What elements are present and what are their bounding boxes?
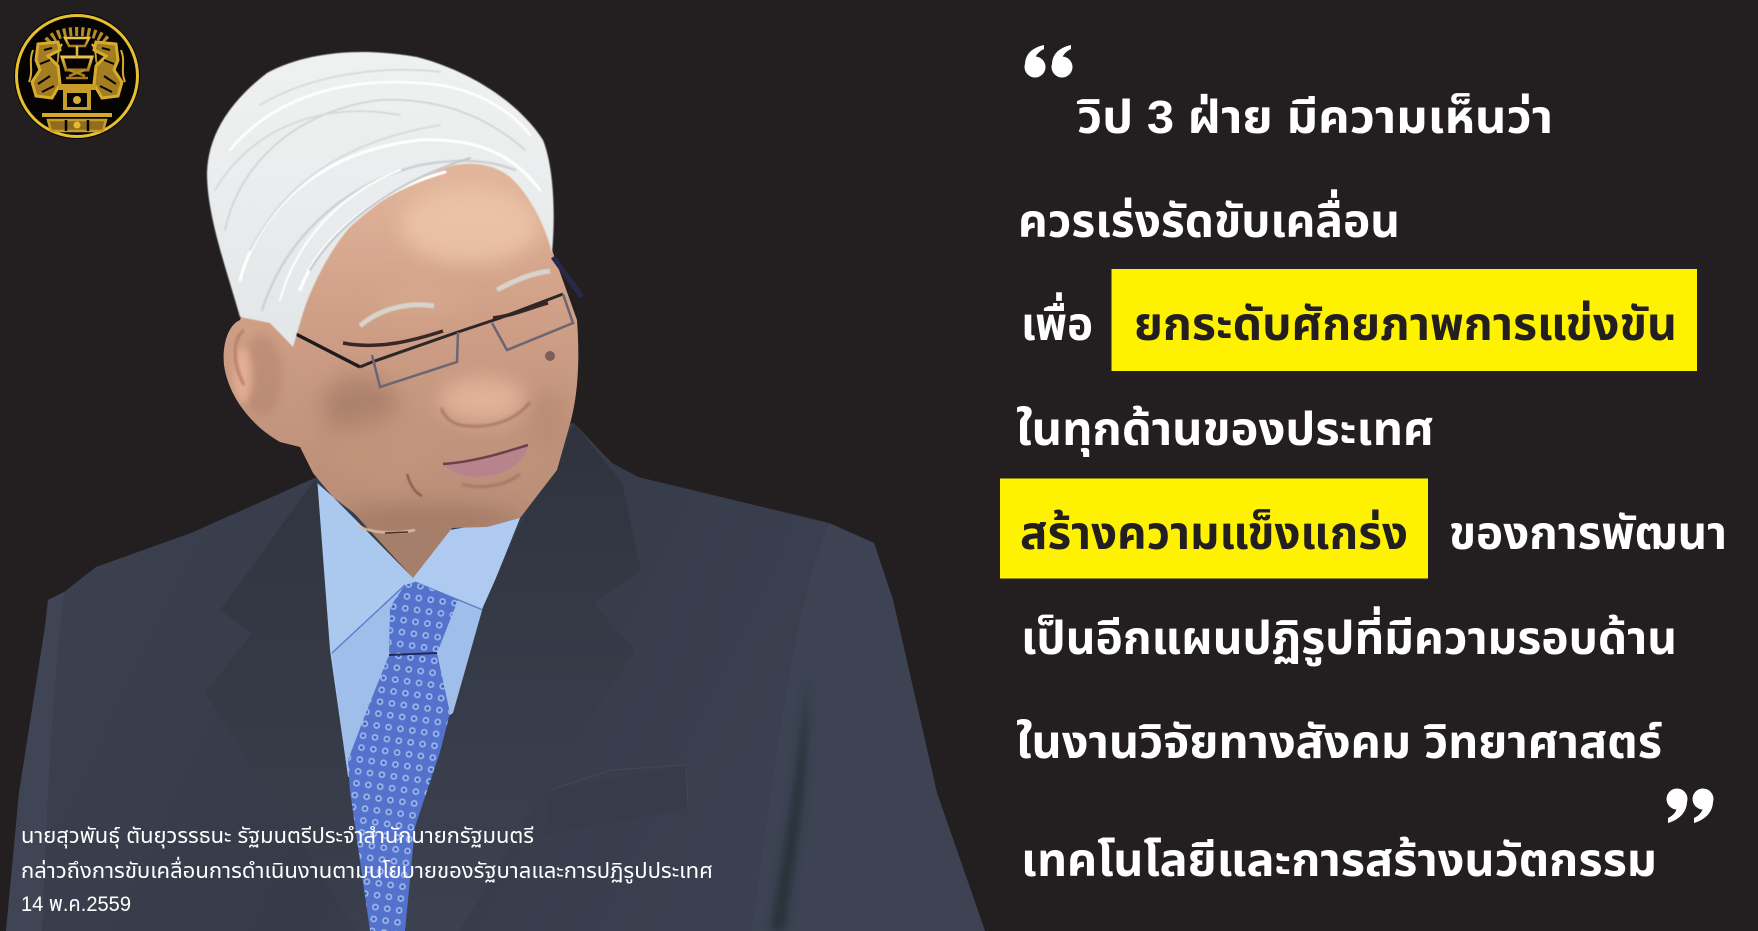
eyebrows: [360, 271, 550, 326]
tie: [348, 582, 458, 931]
logo: government seal: [14, 13, 140, 139]
neck: [333, 490, 452, 578]
mouth: [407, 445, 528, 496]
left collar: [317, 483, 413, 653]
portrait photo: man in suit: [6, 52, 985, 931]
eyes: [343, 303, 548, 345]
right guardian lion: [94, 42, 125, 98]
line 1: วิป 3 ฝ่าย มีความเห็นว่า: [1077, 91, 1553, 143]
glasses: [292, 257, 582, 387]
line 8: เทคโนโลยีและการสร้างนวัตกรรม: [1021, 834, 1657, 886]
nose: [441, 402, 530, 426]
right collar: [413, 518, 520, 610]
line 3: เพื่อ: [1021, 292, 1093, 350]
left lapel: [205, 477, 370, 931]
hair: [207, 52, 554, 347]
highlight box 2: สร้างความแข็งแกร่ง: [1020, 507, 1408, 559]
right lapel: [405, 423, 641, 931]
line 4: ในทุกด้านของประเทศ: [1016, 403, 1434, 457]
caption line 3: 14 พ.ค.2559: [21, 893, 131, 916]
line 2: ควรเร่งรัดขับเคลื่อน: [1018, 189, 1400, 247]
base: [42, 113, 112, 117]
caption: [21, 825, 713, 916]
ear detail: [235, 330, 244, 385]
caption line 2: กล่าวถึงการขับเคลื่อนการดำเนินงานตามนโยบายของรัฐบาลและการปฏิรูปประเทศ: [21, 856, 713, 884]
line 6: เป็นอีกแผนปฏิรูปที่มีความรอบด้าน: [1021, 606, 1677, 666]
quote text panel: [1000, 45, 1727, 886]
face shading: [234, 187, 568, 534]
ear and face: [224, 140, 578, 528]
mole: [545, 351, 555, 361]
shirt: [317, 483, 520, 777]
caption line 1: นายสุวพันธุ์ ตันยุวรรธนะ รัฐมนตรีประจำสำนักนายกรัฐมนตรี: [21, 825, 534, 849]
rays: [48, 32, 107, 42]
left guardian lion: [29, 42, 60, 98]
pedestal: [58, 84, 96, 110]
line 5: ของการพัฒนา: [1449, 507, 1727, 559]
suit jacket: [6, 423, 985, 931]
offering bowl: [56, 38, 98, 78]
highlight box 1: ยกระดับศักยภาพการแข่งขัน: [1134, 298, 1677, 350]
opening quotation mark: [1024, 45, 1072, 78]
line 7: ในงานวิจัยทางสังคม วิทยาศาสตร์: [1016, 716, 1663, 768]
highlight box 2: [1000, 478, 1428, 578]
closing quotation mark: [1666, 788, 1714, 823]
highlight box 1: [1112, 269, 1697, 371]
